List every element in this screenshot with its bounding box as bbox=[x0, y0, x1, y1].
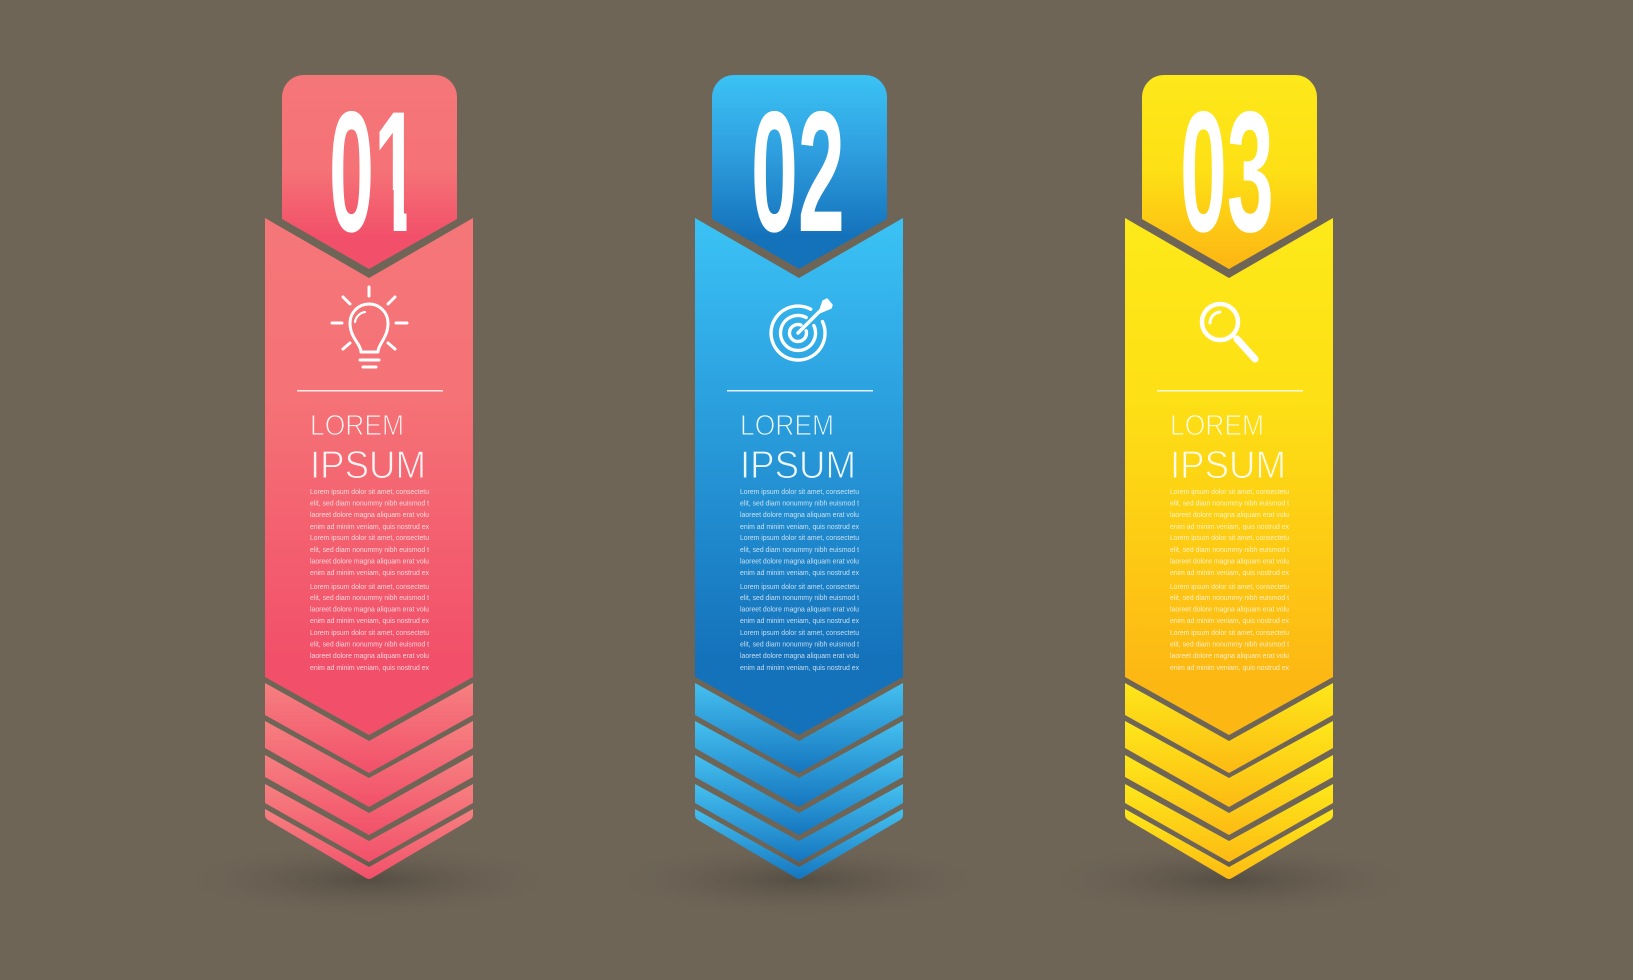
text block: elit, sed diam nonummy nibh euismod t bbox=[1170, 500, 1289, 508]
text block: laoreet dolore magna aliquam erat volu bbox=[310, 512, 429, 519]
text block: Lorem ipsum dolor sit amet, consectetu bbox=[740, 584, 859, 591]
text block: laoreet dolore magna aliquam erat volu bbox=[1170, 512, 1289, 519]
text block: elit, sed diam nonummy nibh euismod t bbox=[740, 595, 859, 602]
text block: elit, sed diam nonummy nibh euismod t bbox=[310, 500, 429, 508]
heading bbox=[310, 410, 426, 487]
divider bbox=[727, 390, 873, 392]
text block: enim ad minim veniam, quis nostrud ex bbox=[310, 524, 429, 531]
stacked chevrons bbox=[1125, 683, 1333, 879]
text block: enim ad minim veniam, quis nostrud ex bbox=[740, 524, 859, 531]
text block: enim ad minim veniam, quis nostrud ex bbox=[1170, 524, 1289, 531]
text block: Lorem ipsum dolor sit amet, consectetu bbox=[740, 489, 859, 496]
text block: enim ad minim veniam, quis nostrud ex bbox=[310, 665, 429, 672]
text block: laoreet dolore magna aliquam erat volu bbox=[740, 558, 859, 566]
text block: enim ad minim veniam, quis nostrud ex bbox=[1170, 618, 1289, 625]
text block: Lorem ipsum dolor sit amet, consectetu bbox=[740, 535, 859, 542]
text block: laoreet dolore magna aliquam erat volu bbox=[1170, 558, 1289, 566]
text block: enim ad minim veniam, quis nostrud ex bbox=[310, 618, 429, 625]
text block: Lorem ipsum dolor sit amet, consectetu bbox=[310, 489, 429, 496]
text block bbox=[1170, 489, 1289, 672]
drop shadow bbox=[604, 842, 994, 918]
text block: Lorem ipsum dolor sit amet, consectetu bbox=[1170, 630, 1289, 637]
panel: 03 bbox=[1034, 75, 1424, 918]
text block: Lorem ipsum dolor sit amet, consectetu bbox=[740, 630, 859, 637]
text block: laoreet dolore magna aliquam erat volu bbox=[740, 653, 859, 660]
tab with number 02 bbox=[712, 75, 887, 269]
main body bbox=[1125, 218, 1333, 735]
icon: magnifying glass bbox=[1202, 304, 1255, 359]
heading: IPSUM bbox=[1170, 444, 1286, 487]
text block: Lorem ipsum dolor sit amet, consectetu bbox=[1170, 489, 1289, 496]
number 02: 02 bbox=[751, 75, 845, 268]
text block: Lorem ipsum dolor sit amet, consectetu bbox=[310, 630, 429, 637]
stacked chevrons bbox=[265, 683, 473, 879]
drop shadow bbox=[1034, 842, 1424, 918]
icon: light bulb bbox=[332, 287, 407, 367]
text block bbox=[740, 489, 859, 672]
text block: elit, sed diam nonummy nibh euismod t bbox=[310, 595, 429, 602]
text block: elit, sed diam nonummy nibh euismod t bbox=[740, 547, 859, 554]
text block: elit, sed diam nonummy nibh euismod t bbox=[1170, 595, 1289, 602]
drop shadow bbox=[174, 842, 564, 918]
heading bbox=[740, 410, 856, 487]
divider bbox=[297, 390, 443, 392]
icon: target with arrow bbox=[771, 299, 832, 360]
text block: laoreet dolore magna aliquam erat volu bbox=[310, 606, 429, 614]
text block: elit, sed diam nonummy nibh euismod t bbox=[740, 642, 859, 648]
text block: enim ad minim veniam, quis nostrud ex bbox=[740, 570, 859, 577]
tab with number 03 bbox=[1142, 75, 1317, 269]
text block: Lorem ipsum dolor sit amet, consectetu bbox=[1170, 535, 1289, 542]
heading: IPSUM bbox=[740, 444, 856, 487]
stacked chevrons bbox=[695, 683, 903, 879]
text block: enim ad minim veniam, quis nostrud ex bbox=[1170, 665, 1289, 672]
text block: laoreet dolore magna aliquam erat volu bbox=[1170, 606, 1289, 614]
text block: elit, sed diam nonummy nibh euismod t bbox=[310, 642, 429, 648]
panel: 02 bbox=[604, 75, 994, 918]
text block: elit, sed diam nonummy nibh euismod t bbox=[1170, 547, 1289, 554]
text block: laoreet dolore magna aliquam erat volu bbox=[310, 653, 429, 660]
number 03: 03 bbox=[1180, 75, 1274, 268]
heading: LOREM bbox=[740, 410, 834, 442]
text block: enim ad minim veniam, quis nostrud ex bbox=[1170, 570, 1289, 577]
text block: elit, sed diam nonummy nibh euismod t bbox=[1170, 642, 1289, 648]
heading bbox=[1170, 410, 1286, 487]
text block: Lorem ipsum dolor sit amet, consectetu bbox=[1170, 584, 1289, 591]
text block bbox=[310, 489, 429, 672]
tab with number 01 bbox=[282, 75, 457, 269]
text block: laoreet dolore magna aliquam erat volu bbox=[310, 558, 429, 566]
heading: LOREM bbox=[1170, 410, 1264, 442]
text block: elit, sed diam nonummy nibh euismod t bbox=[310, 547, 429, 554]
text block: enim ad minim veniam, quis nostrud ex bbox=[740, 665, 859, 672]
heading: IPSUM bbox=[310, 444, 426, 487]
text block: laoreet dolore magna aliquam erat volu bbox=[740, 512, 859, 519]
main body bbox=[265, 218, 473, 735]
text block: Lorem ipsum dolor sit amet, consectetu bbox=[310, 584, 429, 591]
text block: enim ad minim veniam, quis nostrud ex bbox=[740, 618, 859, 625]
text block: Lorem ipsum dolor sit amet, consectetu bbox=[310, 535, 429, 542]
text block: elit, sed diam nonummy nibh euismod t bbox=[740, 500, 859, 508]
text block: laoreet dolore magna aliquam erat volu bbox=[740, 606, 859, 614]
panel: 01 bbox=[265, 75, 473, 896]
number 01: 01 bbox=[329, 76, 419, 268]
text block: laoreet dolore magna aliquam erat volu bbox=[1170, 653, 1289, 660]
text block: enim ad minim veniam, quis nostrud ex bbox=[310, 570, 429, 577]
divider bbox=[1157, 390, 1303, 392]
main body bbox=[695, 218, 903, 735]
heading: LOREM bbox=[310, 410, 404, 442]
